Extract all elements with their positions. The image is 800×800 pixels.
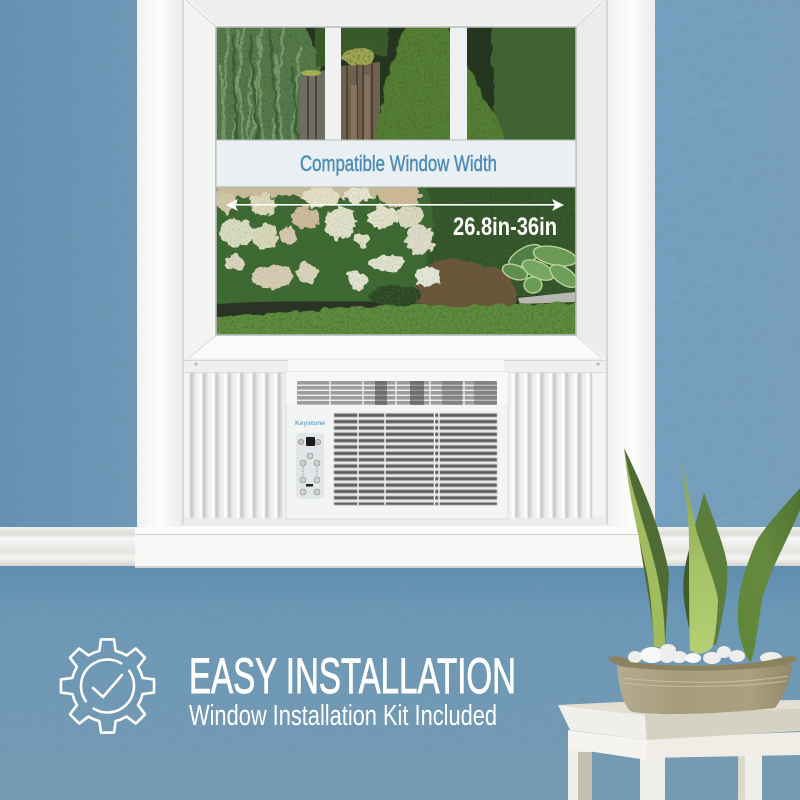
- tall ornamental grass: [210, 20, 322, 145]
- dark shrub foot: [369, 285, 421, 307]
- icon: gear with check: [61, 639, 154, 733]
- leaf dark centre: [695, 493, 727, 645]
- dark mulch line: [216, 301, 520, 318]
- window view: lower garden: [216, 188, 576, 334]
- window muntin left: [325, 27, 341, 140]
- inner glass edge: [216, 27, 576, 335]
- hydrangea foliage: [205, 180, 433, 318]
- width label: 26.8in-36in: [453, 213, 557, 241]
- brown shrub: [414, 258, 516, 306]
- headline: EASY INSTALLATION: [189, 648, 516, 704]
- lower opening frame: [184, 373, 606, 526]
- fence top background foliage: [316, 27, 388, 68]
- leaf right: [738, 488, 800, 662]
- hydrangea blossoms: [215, 183, 441, 289]
- measurement band: [216, 140, 576, 187]
- width arrow: [226, 199, 564, 211]
- hosta plant: [500, 240, 582, 293]
- pot stones: [628, 644, 782, 664]
- wall: lower blue plaster: [0, 565, 800, 800]
- table: [558, 700, 800, 800]
- control panel: [296, 433, 324, 499]
- arborvitae right: [490, 20, 580, 145]
- subheading: Window Installation Kit Included: [189, 700, 497, 732]
- lawn: [205, 302, 585, 345]
- chair rail moulding: [0, 527, 800, 566]
- window casing: [137, 0, 655, 527]
- band heading: Compatible Window Width: [300, 151, 497, 176]
- leaf behind centre: [683, 540, 698, 640]
- pot: [608, 656, 798, 714]
- window sash frame: [184, 0, 606, 360]
- accordion panel left: [190, 373, 288, 518]
- wall: upper blue plaster: [0, 0, 800, 530]
- window muntin right: [450, 27, 467, 140]
- table legs: [568, 745, 762, 800]
- accordion panel right: [508, 373, 592, 518]
- leaf far left: [624, 448, 669, 647]
- front intake grille: [334, 413, 497, 505]
- background evergreen: [410, 180, 585, 295]
- arborvitae centre: [372, 20, 505, 145]
- wooden fence: [300, 49, 380, 140]
- window sill: [135, 527, 655, 568]
- plant: aloe leaves: [624, 448, 800, 662]
- brand name: Keystone: [295, 421, 326, 427]
- window view: upper garden: [216, 28, 576, 140]
- top air vent: [297, 381, 497, 405]
- stone edging: [518, 292, 575, 304]
- leaf bright centre: [681, 458, 718, 654]
- bottom sash rail: [184, 358, 606, 374]
- air conditioner: [286, 372, 508, 519]
